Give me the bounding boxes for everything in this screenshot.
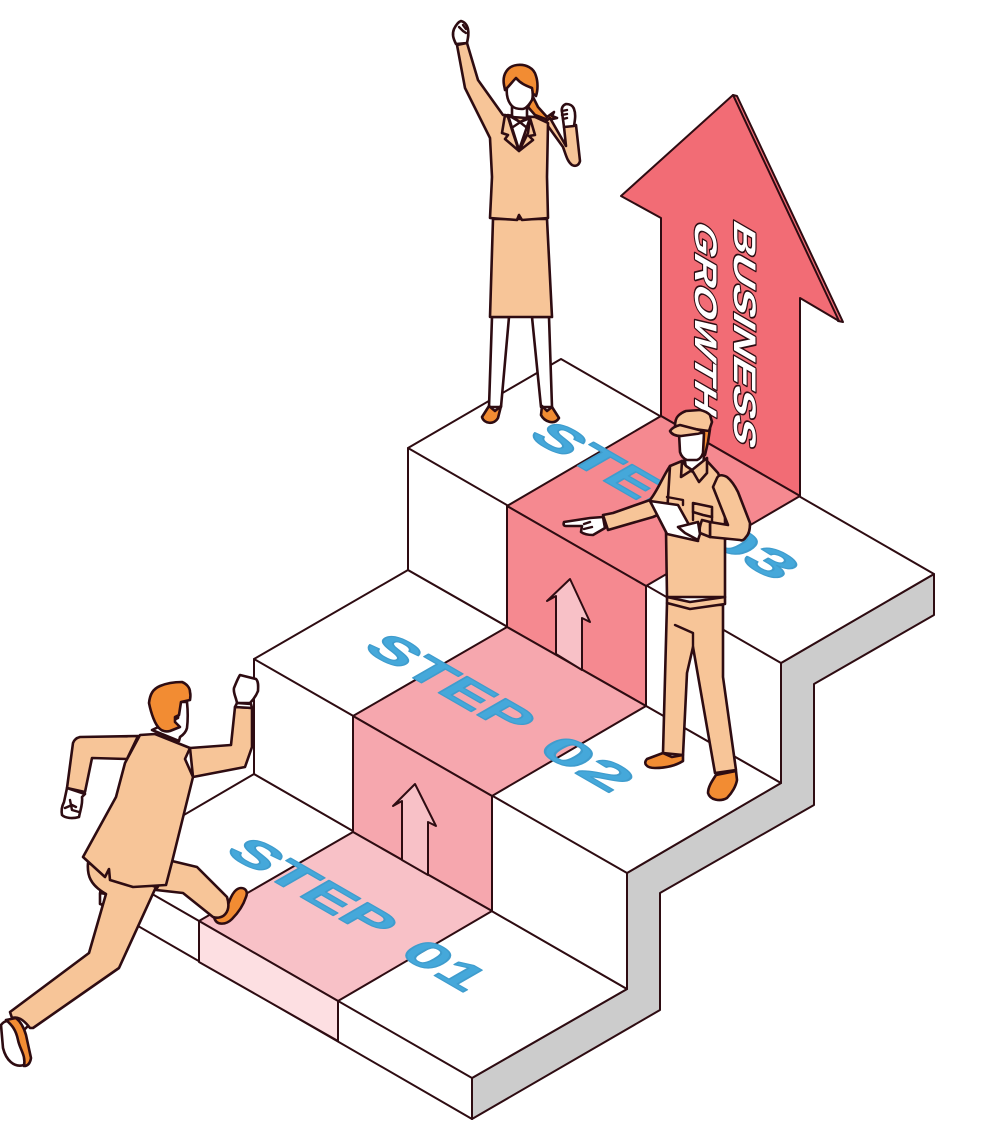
left arm [545, 118, 580, 166]
right arm [710, 475, 750, 540]
pointing hand [564, 517, 605, 535]
raised fist fingers [459, 25, 466, 33]
shoes [482, 406, 501, 423]
cuff [700, 520, 710, 537]
step 1 pink riser [353, 716, 492, 911]
label: step 01 [213, 831, 501, 999]
face [679, 433, 704, 460]
front leg [156, 861, 228, 918]
step 2 white block [254, 570, 781, 989]
label: step 01: 01 [387, 933, 501, 999]
label: step 02: STEP [351, 627, 548, 741]
hair [504, 65, 538, 96]
arrow label: business growth: BUSINESS [727, 214, 763, 457]
label: step 02: 02 [525, 729, 648, 800]
fist fingers [562, 110, 567, 119]
cap [675, 410, 712, 431]
raised fist [453, 21, 468, 44]
shirt [508, 115, 530, 150]
arrow label: business growth: GROWTH [688, 214, 724, 425]
fly line [675, 625, 693, 647]
step 3 pink tread [507, 416, 800, 586]
face [507, 78, 533, 109]
trousers [663, 603, 736, 773]
shoes [645, 753, 683, 768]
step 3 white block [408, 359, 934, 783]
step 1 pink tread [199, 832, 492, 1001]
label: step 03 [516, 415, 813, 588]
legs [489, 317, 552, 407]
staircase [100, 95, 934, 1119]
front shoe [214, 888, 247, 924]
lapels [502, 115, 519, 151]
jacket with raised arm [457, 43, 548, 220]
back shoe [13, 1013, 30, 1030]
neck [684, 455, 704, 472]
label: step 03: 03 [690, 517, 813, 588]
figure: delivery worker [564, 410, 750, 800]
skirt [490, 219, 552, 317]
holding hand [678, 522, 700, 540]
hand fingers [584, 522, 592, 529]
torso [666, 461, 725, 597]
back leg [10, 863, 156, 1028]
hair side [702, 429, 710, 455]
cuff [235, 703, 252, 708]
collar [681, 461, 692, 477]
pointing arm [603, 466, 680, 530]
big growth arrow [621, 95, 839, 496]
step 1 white block [100, 774, 627, 1119]
figure: running man [1, 675, 258, 1066]
hair [149, 682, 190, 731]
staircase side: grey wall [472, 574, 934, 1119]
neck and collar [152, 702, 188, 741]
label: step 02 [351, 627, 648, 800]
front arm [190, 707, 252, 777]
waist band [667, 597, 725, 609]
up arrow on step 1 riser [393, 784, 436, 875]
shirt tail [100, 893, 106, 905]
step edges [100, 448, 781, 1119]
fist [562, 104, 575, 127]
step 2 pink tread [353, 627, 646, 796]
neck [512, 102, 527, 118]
back hand [62, 788, 85, 818]
label: step 01: STEP [213, 831, 410, 945]
ponytail [528, 97, 557, 120]
up arrow on step 2 riser [547, 579, 590, 670]
front fist [234, 675, 258, 703]
arrow label: business growth [688, 214, 763, 457]
back arm [67, 736, 138, 792]
clipboard [650, 501, 698, 541]
pockets [693, 503, 712, 517]
step 1 pale front face [199, 921, 338, 1041]
collar cross [512, 116, 528, 127]
step 2 pink riser [507, 506, 646, 706]
jacket [83, 734, 193, 887]
big arrow side [733, 95, 843, 322]
back hand fingers [65, 800, 79, 812]
figure: woman cheering [453, 21, 580, 423]
label: step 03: STEP [516, 415, 713, 529]
